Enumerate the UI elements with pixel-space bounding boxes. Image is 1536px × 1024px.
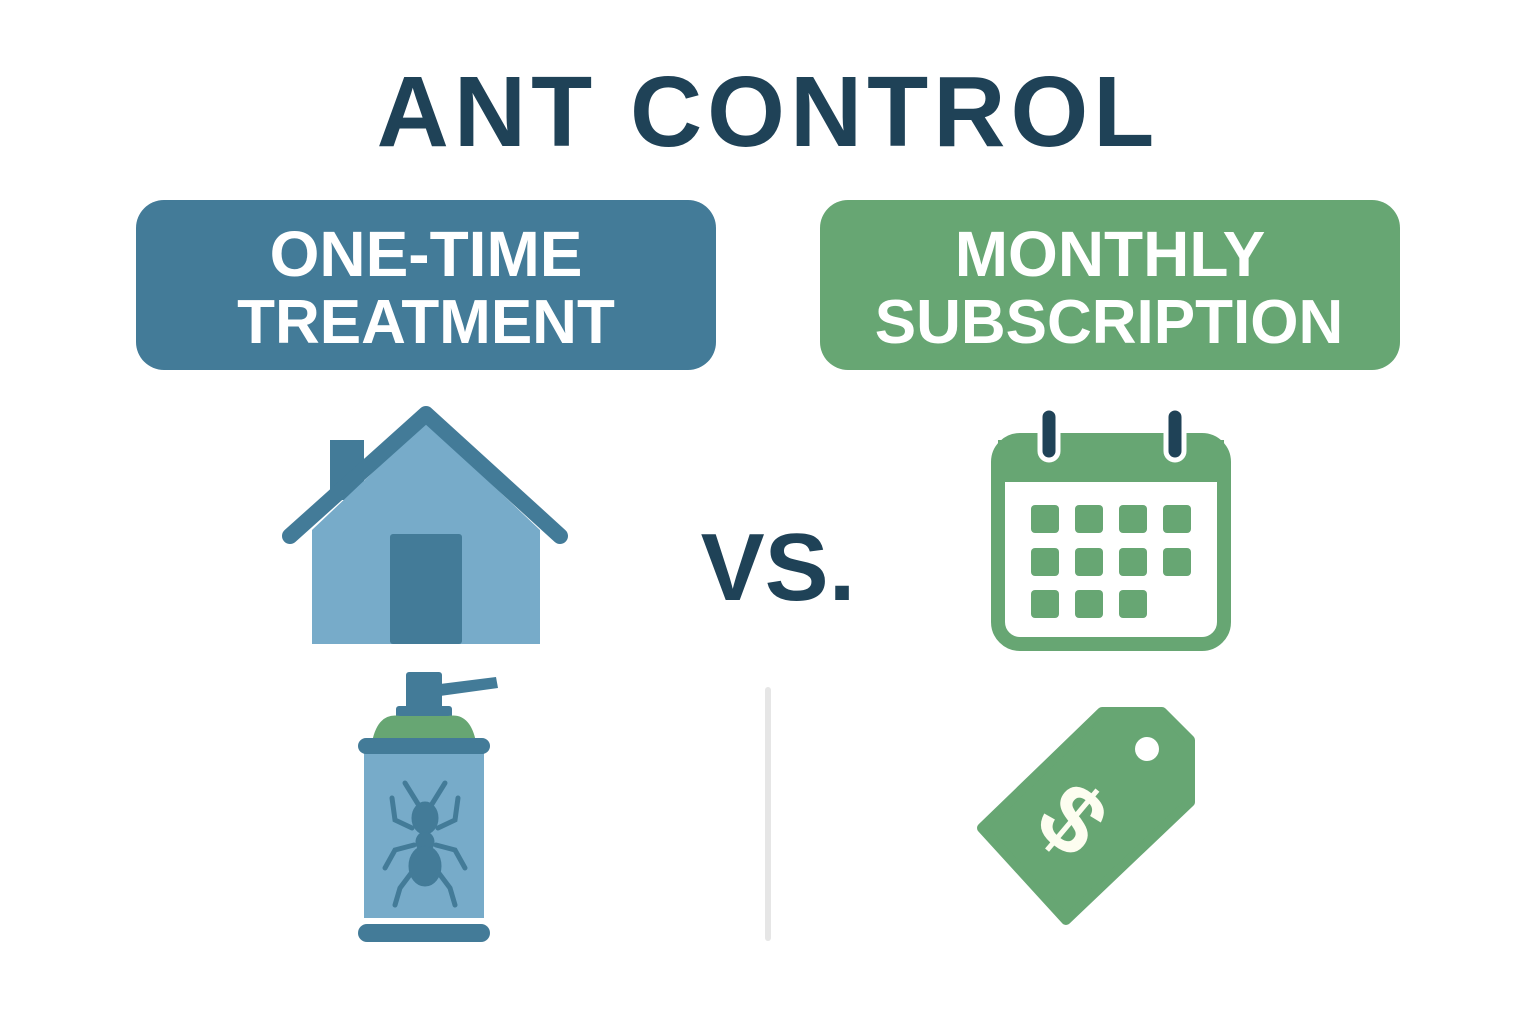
panel: one-time treatment header: ONE-TIME xyxy=(270,218,582,290)
icon: ant spray can xyxy=(358,672,498,942)
vs text: VS. xyxy=(701,514,855,621)
icon: price tag xyxy=(982,712,1190,920)
divider xyxy=(765,690,771,938)
title: ANT CONTROL xyxy=(377,56,1159,168)
panel: one-time treatment header xyxy=(136,200,716,370)
panel: monthly subscription header: MONTHLY xyxy=(955,218,1265,290)
icon: calendar xyxy=(998,408,1224,644)
panel: monthly subscription header: SUBSCRIPTION xyxy=(875,288,1343,357)
icon: price tag: $ xyxy=(1017,761,1127,878)
panel: monthly subscription header xyxy=(820,200,1400,370)
panel: one-time treatment header: TREATMENT xyxy=(237,288,615,357)
icon: house xyxy=(290,414,560,644)
